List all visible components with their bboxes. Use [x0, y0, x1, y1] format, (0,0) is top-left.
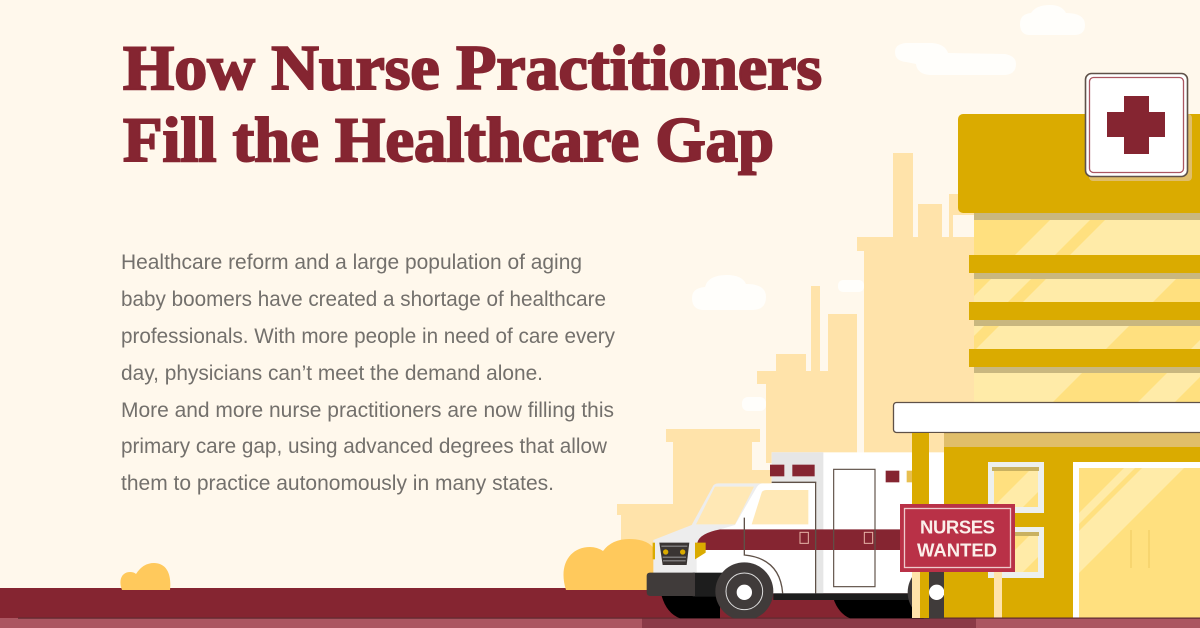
sign post: [994, 572, 1002, 618]
bumper and chassis: [647, 573, 913, 600]
hospital upper floors: [969, 213, 1200, 402]
clouds: [692, 5, 1085, 411]
hospital cross sign: [1086, 74, 1192, 181]
body text: day, physicians can’t meet the demand alone.: [121, 362, 543, 385]
nurses wanted sign: WANTED: [917, 540, 997, 560]
body text: professionals. With more people in need of care every: [121, 325, 615, 348]
door: [1073, 462, 1200, 618]
title: [123, 33, 822, 175]
title: Fill the Healthcare Gap: [123, 105, 774, 175]
cab: [653, 483, 817, 593]
tires: [662, 596, 930, 618]
box body: [772, 452, 944, 593]
canopy column: [912, 433, 944, 618]
bush: large: [563, 539, 656, 590]
front wheel: [715, 562, 773, 620]
ground road: [0, 588, 1200, 628]
roof lights: [770, 465, 913, 482]
body text: Healthcare reform and a large population of aging: [121, 251, 582, 274]
canopy: [894, 402, 1200, 432]
hospital ground floor: [944, 433, 1200, 618]
red stripe: [697, 529, 907, 550]
body text: primary care gap, using advanced degrees that allow: [121, 435, 608, 458]
body text: baby boomers have created a shortage of healthcare: [121, 288, 606, 311]
window upper: [988, 462, 1044, 513]
door lines: [744, 469, 875, 593]
nurses wanted sign: NURSES: [920, 516, 995, 538]
rear wheel: [908, 572, 944, 618]
city skyline: [617, 153, 974, 591]
title: How Nurse Practitioners: [123, 33, 822, 103]
grille and headlights: [653, 543, 706, 565]
body text: them to practice autonomously in many states.: [121, 472, 554, 495]
bush: small: [120, 563, 170, 590]
nurses wanted sign: [900, 504, 1015, 572]
body text: [121, 251, 615, 495]
ambulance: [647, 452, 966, 621]
hospital roof: [958, 114, 1200, 213]
window lower: [988, 527, 1044, 578]
body text: More and more nurse practitioners are now filling this: [121, 399, 614, 422]
